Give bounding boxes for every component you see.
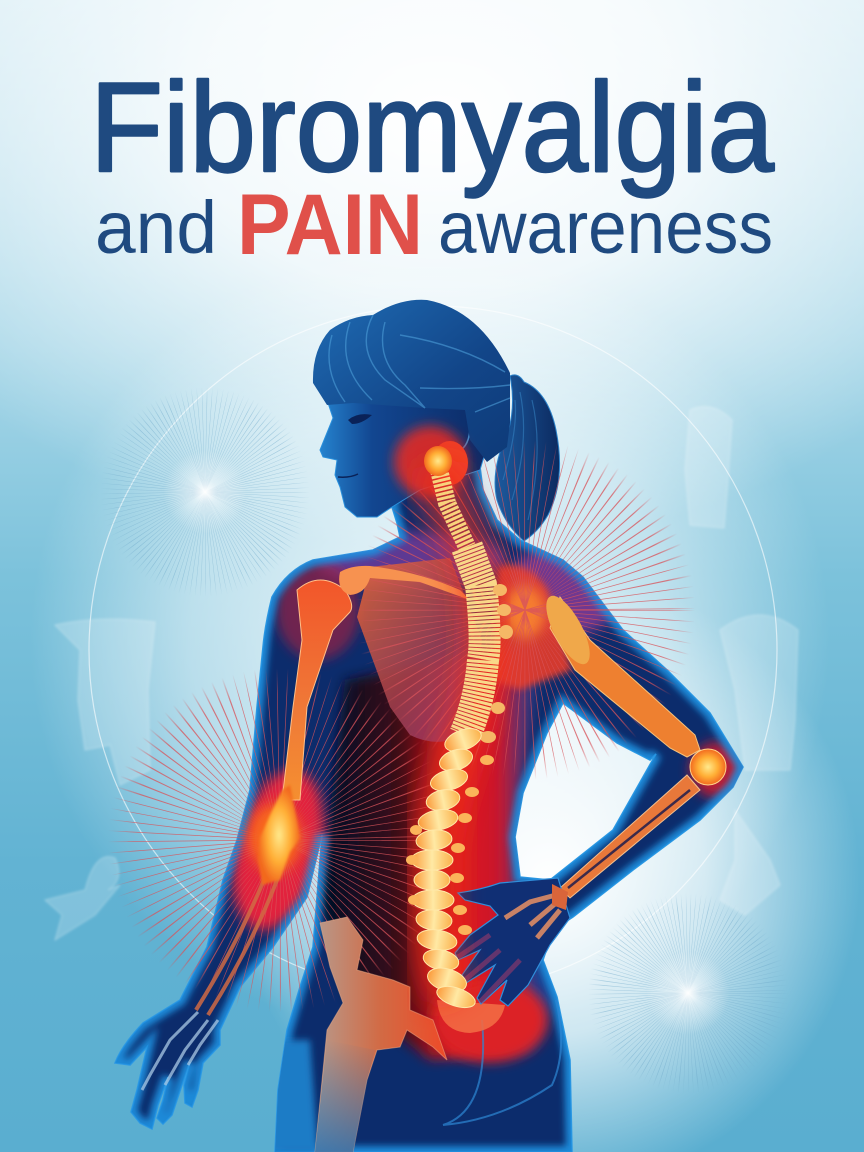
eye bbox=[348, 414, 372, 424]
sunburst: red behind shoulder bbox=[440, 525, 610, 695]
face bbox=[320, 395, 495, 517]
heading: Fibromyalgia: Fibromyalgia bbox=[90, 56, 774, 198]
left hand bones bbox=[142, 1012, 218, 1090]
top vertebra bbox=[424, 446, 452, 476]
thoracic vertebrae bbox=[465, 547, 485, 735]
left leg blue band bbox=[270, 1040, 318, 1152]
sunburst: red behind elbow bbox=[194, 754, 366, 926]
scapula left bbox=[357, 558, 482, 742]
humerus right bbox=[550, 597, 700, 757]
shoulder purple bbox=[315, 532, 505, 588]
sunburst: upper left bbox=[153, 440, 257, 544]
cervical vertebrae bbox=[439, 470, 467, 547]
elbow glow bbox=[249, 804, 301, 872]
head bbox=[313, 300, 510, 517]
right hand bbox=[455, 878, 570, 1006]
left arm bones bbox=[196, 566, 470, 1015]
body interior shading bbox=[115, 440, 746, 1152]
spine bbox=[406, 446, 513, 1012]
fingers tint bbox=[458, 935, 520, 1002]
right elbow red bbox=[690, 742, 746, 798]
hair bbox=[313, 300, 510, 462]
torso red glow bbox=[320, 640, 555, 1060]
butt crease bbox=[443, 1000, 561, 1125]
subheading: PAIN: PAIN bbox=[237, 177, 423, 273]
figure bbox=[115, 300, 746, 1152]
lumbar processes bbox=[406, 755, 494, 935]
ghost figure: lower right bbox=[720, 810, 780, 915]
sacrum bbox=[437, 1000, 505, 1033]
pelvis fade bbox=[315, 1040, 375, 1152]
left arm red aura bbox=[226, 761, 334, 940]
ponytail bbox=[495, 375, 560, 541]
ghost figure: right torso bbox=[720, 615, 798, 770]
forearm bones bbox=[560, 775, 700, 898]
hand bones bbox=[505, 895, 560, 938]
ear bbox=[440, 399, 470, 452]
pelvis bone bbox=[315, 917, 447, 1152]
humerus bbox=[282, 580, 352, 800]
neck glow bbox=[394, 426, 468, 498]
hip red patch bbox=[432, 978, 548, 1062]
left shoulder red bbox=[276, 560, 360, 660]
faint anatomy figures bbox=[45, 407, 798, 940]
thin orbit circle bbox=[89, 306, 777, 994]
wrist carpals bbox=[552, 884, 568, 910]
thoracic side bumps bbox=[480, 584, 513, 743]
ghost figure: left swimmer bbox=[45, 857, 120, 940]
forearm bones bbox=[196, 870, 280, 1015]
spine glow bbox=[433, 465, 485, 997]
forearm gap bbox=[568, 790, 690, 888]
clavicle bbox=[339, 566, 470, 600]
subheading: awareness: awareness bbox=[438, 186, 773, 269]
hair strands bbox=[329, 315, 510, 412]
right shoulder purple bbox=[508, 548, 612, 639]
subheading: and: and bbox=[95, 186, 217, 269]
red scapula right bbox=[490, 565, 572, 690]
shoulder head right bbox=[538, 590, 598, 670]
title bbox=[90, 56, 774, 273]
sunburst: lower right bbox=[638, 943, 738, 1043]
ghost figure: upper right bbox=[685, 407, 732, 528]
lumbar vertebrae bbox=[411, 724, 484, 1012]
elbow ball bbox=[690, 749, 726, 785]
body silhouette bbox=[115, 440, 743, 1152]
right arm bones bbox=[538, 590, 726, 898]
ghost figure: left torso bbox=[55, 619, 155, 785]
mouth bbox=[338, 474, 358, 477]
elbow joint bbox=[258, 785, 300, 885]
inner rim light bbox=[115, 440, 743, 1152]
